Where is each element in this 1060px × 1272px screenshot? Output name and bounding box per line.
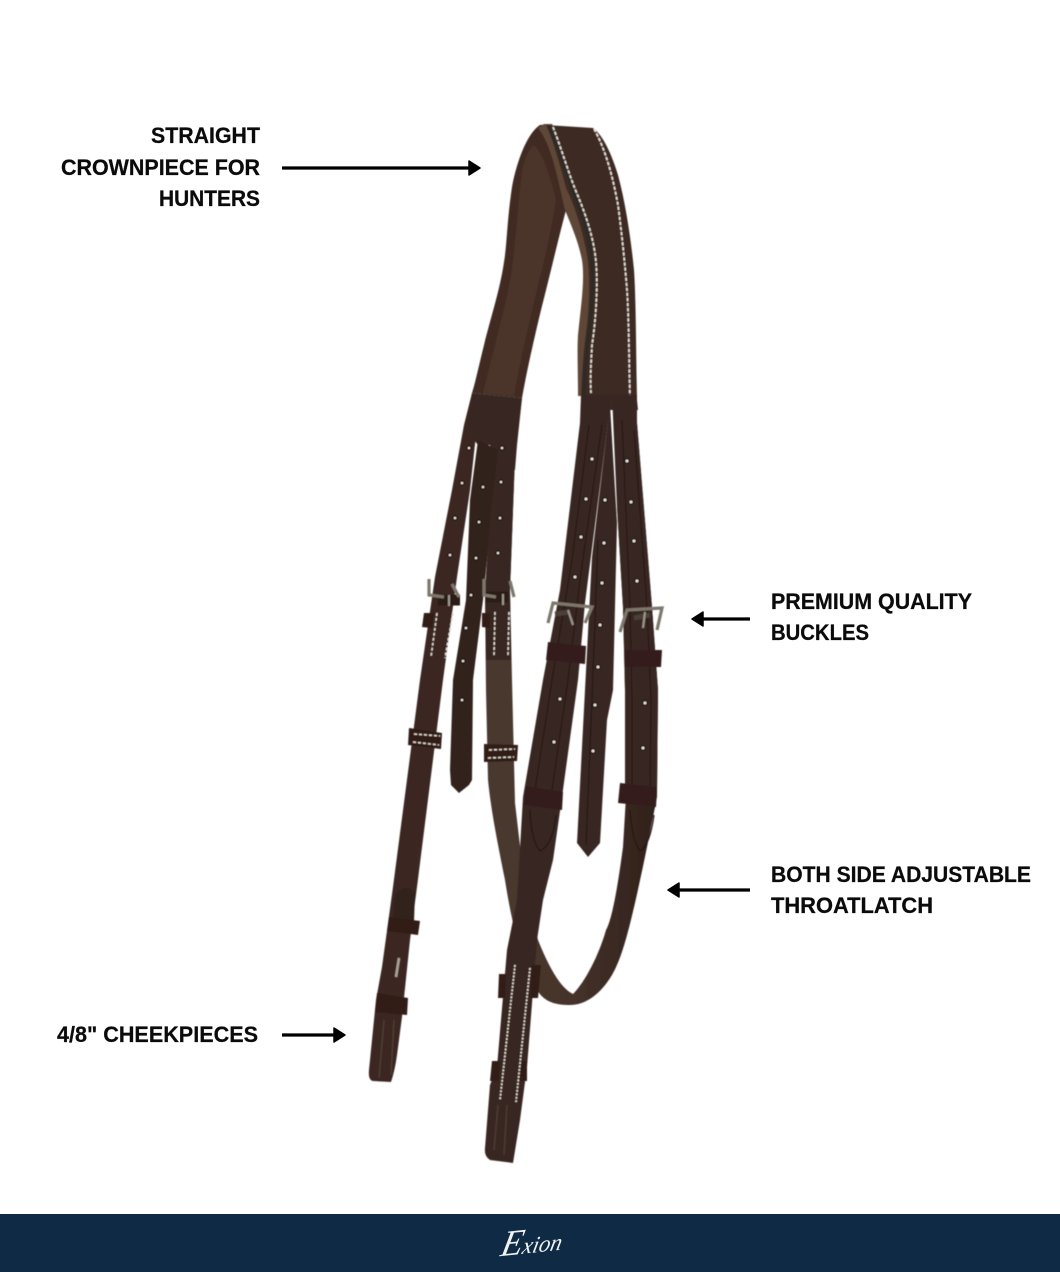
centre point strap	[577, 405, 617, 857]
arrow: to cheekpieces	[282, 1028, 345, 1042]
callout: premium buckles	[692, 589, 972, 645]
callout: straight crownpiece: HUNTERS	[159, 186, 260, 211]
headstall photo illustration	[369, 124, 662, 1163]
upper crown block	[468, 393, 522, 470]
callout: adjustable throatlatch	[668, 862, 1031, 918]
arrow: to crownpiece	[282, 161, 480, 175]
crownpiece suede padding	[472, 124, 590, 398]
callout: straight crownpiece	[61, 123, 480, 211]
throat strap and loop	[485, 395, 658, 1005]
callout: straight crownpiece: STRAIGHT	[151, 123, 261, 148]
cheek stud	[396, 958, 399, 977]
callout: adjustable throatlatch: BOTH SIDE ADJUSTABLE	[771, 862, 1031, 887]
arrow: to buckles	[692, 612, 750, 626]
footer band	[0, 1214, 1060, 1272]
left buckle strap	[485, 395, 612, 1163]
arrow: to throatlatch	[668, 883, 750, 897]
callout: cheekpieces: 4/8" CHEEKPIECES	[57, 1022, 258, 1047]
cheek upper strap	[485, 450, 515, 660]
callout: premium buckles: PREMIUM QUALITY	[771, 589, 972, 614]
keeper and billet stitching	[413, 612, 530, 1102]
brand logo: Exion	[497, 1217, 568, 1264]
cheek point cap	[393, 888, 415, 922]
right buckle strap	[612, 395, 658, 790]
crownpiece leather with stitching	[546, 125, 638, 410]
callout: straight crownpiece: CROWNPIECE FOR	[61, 155, 260, 180]
buckles	[429, 579, 662, 632]
keepers	[375, 613, 662, 1081]
strap holes	[448, 446, 647, 753]
cheek strap	[369, 393, 480, 1082]
right straps group	[379, 395, 658, 1163]
point strap	[450, 440, 498, 793]
callout: adjustable throatlatch: THROATLATCH	[771, 893, 933, 918]
stitching lines	[553, 127, 597, 393]
callout: premium buckles: BUCKLES	[771, 620, 869, 645]
left straps group	[369, 393, 658, 1082]
